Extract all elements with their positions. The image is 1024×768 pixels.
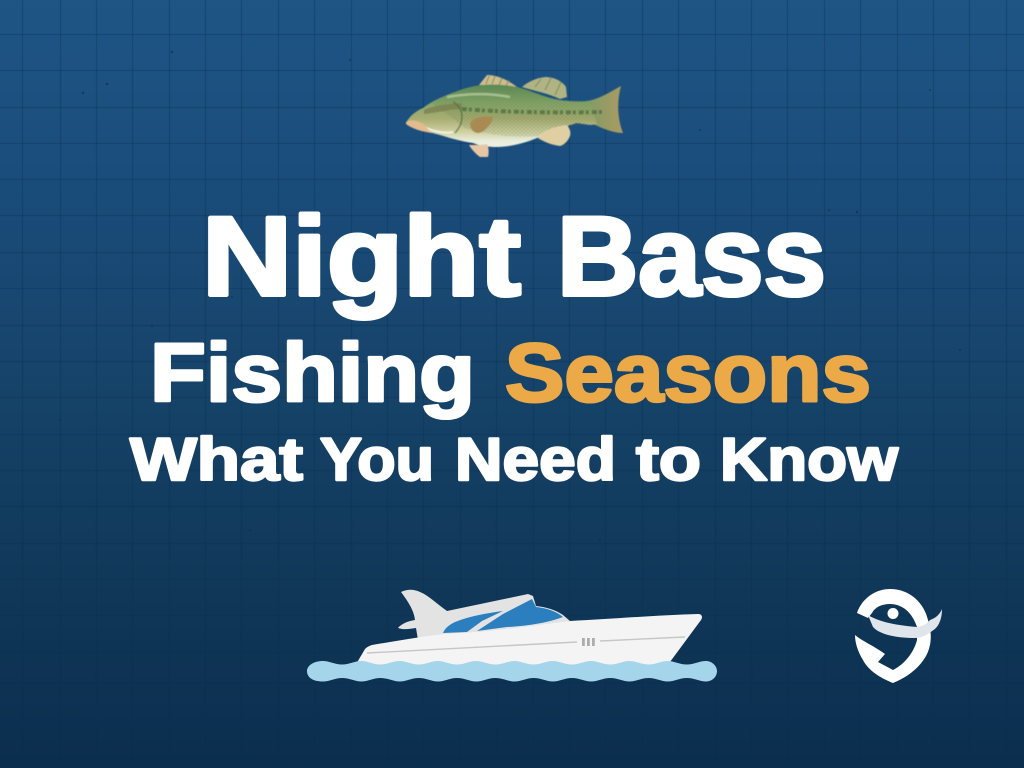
title: Fishing Seasons bbox=[150, 326, 871, 419]
water bbox=[307, 661, 717, 682]
hull bbox=[355, 614, 702, 666]
windows bbox=[443, 599, 563, 633]
dorsal fins bbox=[479, 75, 567, 99]
subtitle: to bbox=[636, 426, 701, 493]
cabin bbox=[398, 590, 570, 640]
subtitle: Need bbox=[455, 426, 616, 493]
lateral stripe and markings bbox=[420, 94, 602, 133]
subtitle bbox=[130, 426, 898, 493]
title: Night Bass bbox=[202, 194, 826, 319]
title: Fishing Seasons: Fishing bbox=[150, 326, 475, 419]
lower fins bbox=[469, 125, 570, 157]
mouth bbox=[406, 121, 432, 133]
tail fin bbox=[586, 86, 623, 133]
title: Night Bass: Night bbox=[202, 194, 521, 319]
illustration: largemouth bass bbox=[406, 75, 623, 157]
vents bbox=[582, 638, 595, 646]
title: Night Bass: Bass bbox=[557, 194, 826, 319]
scale texture bbox=[432, 85, 597, 137]
subtitle: Know bbox=[720, 426, 898, 493]
title: Fishing Seasons: Seasons bbox=[505, 326, 871, 419]
subtitle: You bbox=[320, 426, 434, 493]
illustration: boat on water bbox=[307, 590, 717, 682]
logo band bbox=[868, 609, 942, 638]
logo body bbox=[855, 589, 931, 683]
hull trim bbox=[367, 637, 685, 653]
subtitle: What bbox=[130, 426, 303, 493]
logo eye bbox=[888, 608, 898, 619]
body bbox=[407, 85, 597, 147]
logo: fish and hook bbox=[855, 589, 942, 683]
